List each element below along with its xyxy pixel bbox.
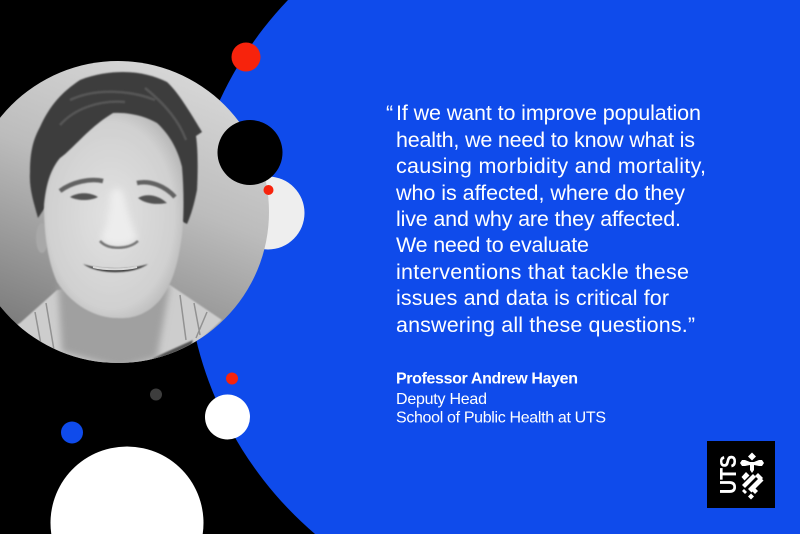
mouth [83, 264, 148, 272]
attribution: School of Public Health at UTS [396, 410, 606, 426]
circle: pale grey [232, 176, 304, 250]
eyebrows [60, 180, 175, 197]
UTS logo: UTS [715, 455, 741, 494]
quote text: live and why are they affected. [396, 207, 681, 231]
quote text: “ [386, 101, 393, 125]
quote text: causing morbidity and mortality, [396, 154, 706, 178]
circle: blue small [61, 422, 83, 444]
circle: small red on pale grey [264, 185, 274, 195]
circle: dark grey [150, 388, 162, 400]
quote text: If we want to improve population [396, 101, 701, 125]
circle: red top [232, 42, 260, 72]
shirt [0, 285, 222, 363]
UTS logo [707, 441, 775, 508]
quote text: who is affected, where do they [395, 181, 685, 205]
logo emblem [740, 452, 764, 500]
circle: white medium [205, 394, 250, 440]
attribution: Professor Andrew Hayen [396, 370, 578, 388]
quote text: issues and data is critical for [396, 286, 669, 310]
eyes [70, 193, 167, 204]
quote text: We need to evaluate [396, 233, 589, 257]
attribution [396, 370, 606, 426]
circle: small red lower [226, 372, 238, 384]
attribution: Deputy Head [396, 391, 487, 408]
portrait photo [0, 61, 269, 368]
blue curved panel [186, 0, 800, 534]
nose [101, 188, 137, 246]
quote text: health, we need to know what is [396, 128, 695, 152]
quote text: interventions that tackle these [396, 260, 689, 284]
face [44, 113, 184, 318]
left ear [36, 231, 46, 252]
circle: black [218, 120, 282, 185]
hair [30, 72, 202, 224]
neck [58, 285, 170, 368]
circle: large white [50, 446, 204, 534]
quote text: answering all these questions.” [396, 313, 695, 337]
quote text [386, 101, 706, 337]
